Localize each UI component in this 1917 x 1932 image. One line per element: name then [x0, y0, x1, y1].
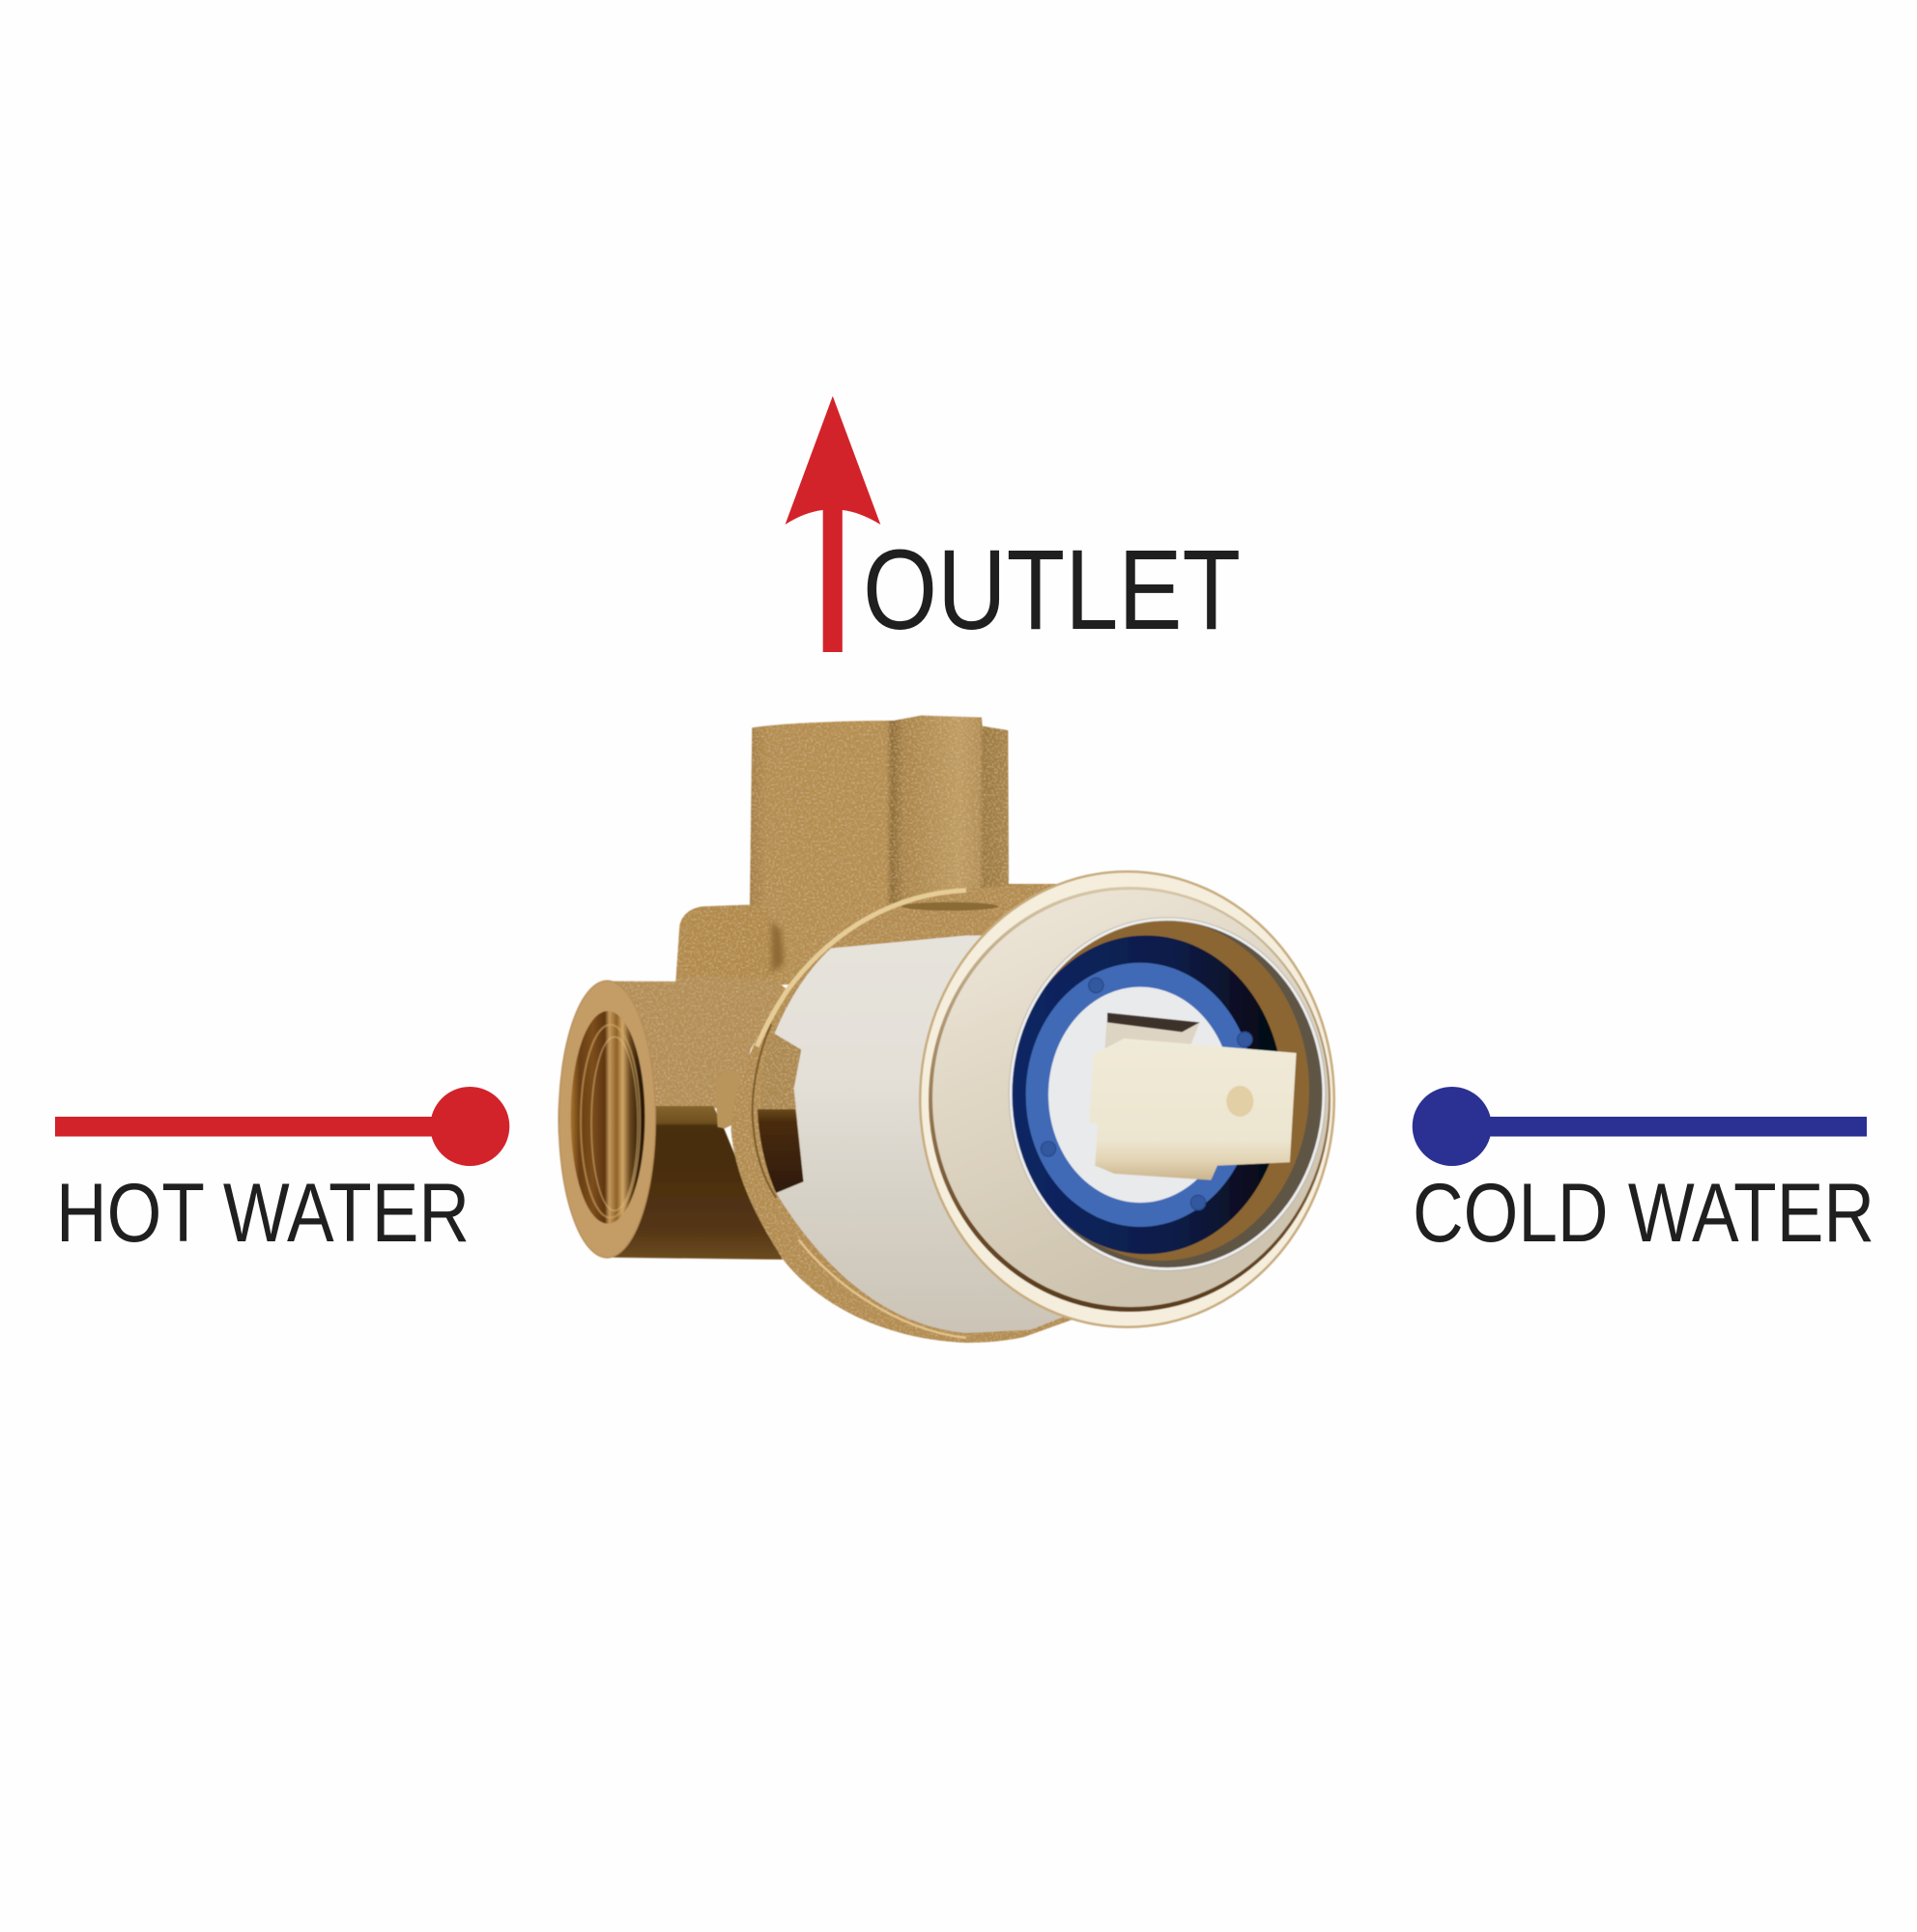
inlet pipe lower shadow	[611, 1106, 783, 1260]
brass side lug	[675, 905, 771, 982]
inlet pipe rim	[558, 980, 655, 1258]
spindle	[1089, 1038, 1297, 1180]
notch lower shadow	[758, 1109, 804, 1193]
casting ridge	[715, 1069, 751, 1128]
flange inner arc	[753, 1024, 776, 1198]
bezel opening rim	[1011, 920, 1324, 1269]
inlet pipe upper	[607, 977, 786, 1111]
cartridge slot	[1104, 1012, 1200, 1051]
blue cartridge ring	[1026, 963, 1254, 1227]
flange highlight arc	[757, 891, 966, 1046]
chrome cylinder	[775, 935, 1153, 1333]
spindle end hole	[1226, 1086, 1253, 1117]
hot water connector	[55, 1087, 509, 1166]
gold inner wall	[1049, 921, 1310, 1262]
cartridge screws	[1041, 978, 1252, 1210]
bezel highlight ring	[922, 873, 1333, 1325]
flange shadow lens	[901, 902, 998, 911]
bezel outer edge	[919, 870, 1335, 1328]
white cartridge centre	[1048, 987, 1232, 1203]
outlet label: OUTLET	[863, 526, 1241, 654]
cold water connector	[1413, 1087, 1867, 1166]
hot water label: HOT WATER	[56, 1167, 470, 1260]
bezel face	[932, 890, 1329, 1307]
bezel dark groove	[929, 887, 1330, 1312]
bezel opening	[1009, 918, 1326, 1270]
chrome inner wall	[1055, 923, 1323, 1268]
outlet arrow	[786, 396, 880, 652]
dark cartridge recess	[1009, 935, 1283, 1254]
notch upper brass	[760, 1034, 802, 1109]
flange lower gold line	[799, 1239, 966, 1338]
lug crease shadow	[771, 921, 785, 974]
brass outlet column	[750, 716, 1041, 985]
flange and upper brass band	[731, 884, 1153, 1343]
valve photo illustration	[558, 716, 1335, 1343]
inlet pipe threaded bore	[571, 1011, 644, 1224]
